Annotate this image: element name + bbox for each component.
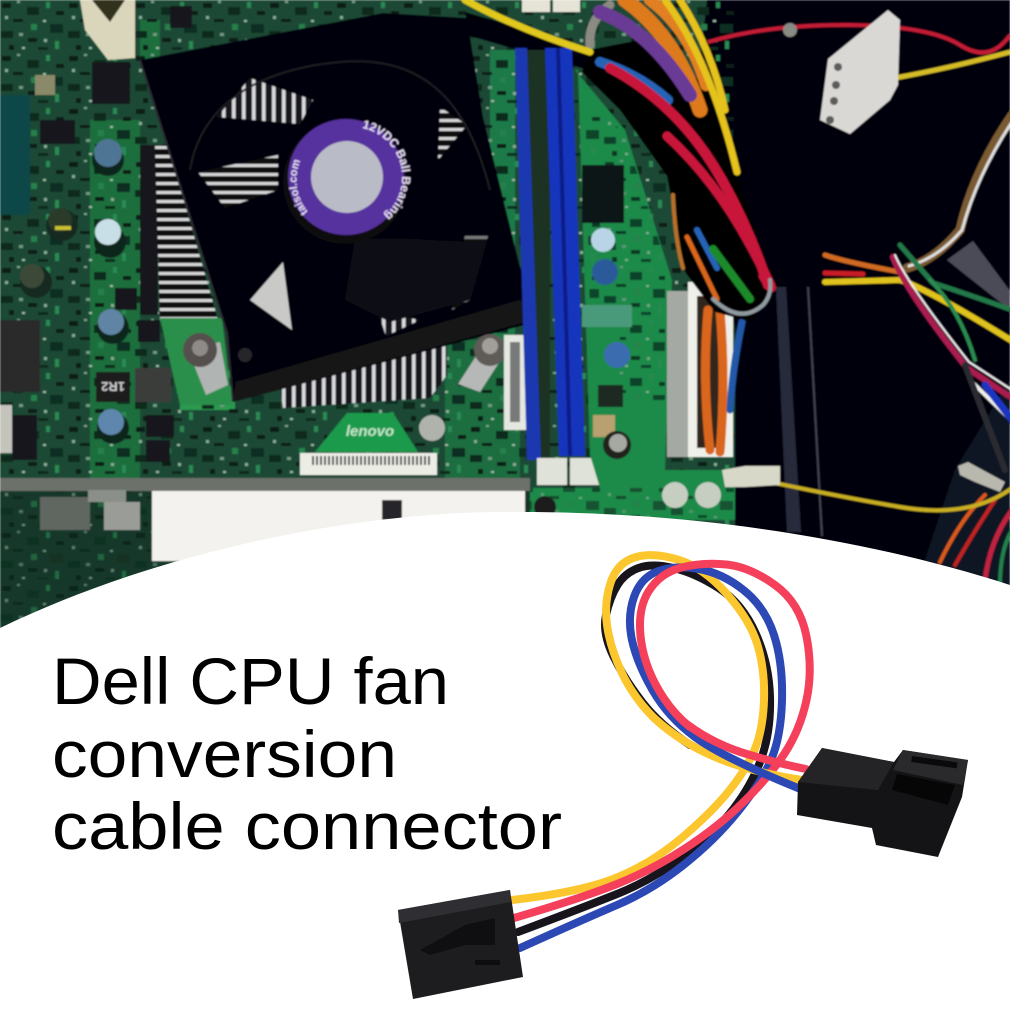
fan hub sticker bbox=[283, 118, 412, 244]
ram label bbox=[504, 335, 526, 430]
four-colour wire loop bbox=[512, 555, 810, 948]
wire ends crossing over into right connector bbox=[654, 718, 806, 788]
barcode label bbox=[300, 453, 437, 475]
bright green board strips bbox=[90, 20, 520, 480]
cream header connector, top left bbox=[80, 0, 135, 60]
fin patch lower right bbox=[378, 312, 420, 336]
expansion card strip bbox=[0, 478, 530, 631]
black board chips bbox=[0, 6, 192, 462]
fin patch lower middle bbox=[250, 262, 292, 330]
atx connector bbox=[667, 282, 733, 457]
ram slot latches bbox=[522, 0, 600, 485]
cpu fan frame bbox=[140, 13, 545, 402]
pcb component texture bbox=[0, 0, 735, 640]
fin patch top bbox=[217, 78, 313, 124]
fin patch left bbox=[198, 155, 278, 208]
title bbox=[52, 644, 562, 863]
black cable behind fan bbox=[465, 12, 590, 70]
left fins bbox=[155, 145, 218, 320]
hub label taisol.com: taisol.com bbox=[288, 158, 308, 217]
dark chassis area bbox=[735, 0, 1010, 640]
chassis metal edges bbox=[776, 241, 1010, 600]
teal chip at left edge bbox=[0, 95, 30, 215]
motherboard base bbox=[0, 0, 740, 640]
frame outline bbox=[140, 60, 233, 402]
white molex connector bbox=[820, 10, 900, 134]
product: conversion cable bbox=[398, 555, 968, 999]
small white fan header bbox=[722, 466, 780, 487]
4-pin fan connector, left bbox=[398, 890, 523, 999]
red wire, top right bbox=[708, 25, 1010, 53]
power supply cable bundle bbox=[465, 0, 772, 322]
fan ring bbox=[190, 61, 490, 190]
heatsink under fan bbox=[155, 145, 447, 408]
capacitors bbox=[20, 139, 445, 444]
blade highlight right bbox=[345, 239, 487, 322]
fan opening and blades bbox=[140, 60, 540, 402]
yellow wire from molex bbox=[895, 52, 1010, 78]
lenovo logo plate: lenovo bbox=[346, 423, 394, 440]
cable tie bbox=[783, 23, 797, 37]
chassis left edge beside board bbox=[700, 0, 760, 530]
small fan cable, yellow bbox=[752, 478, 1010, 510]
3-pin fan connector, right bbox=[797, 748, 968, 857]
ram slots bbox=[515, 48, 585, 460]
white curved panel bbox=[0, 512, 1010, 1010]
orange wires into atx bbox=[705, 310, 742, 452]
title line 2: conversion bbox=[52, 717, 397, 791]
fin patch right side bbox=[452, 235, 488, 310]
hub label 12VDC Ball Bearing: 12VDC Ball Bearing bbox=[362, 119, 412, 221]
bottom fins bbox=[280, 340, 447, 408]
frame bottom band bbox=[233, 300, 540, 402]
fin patch right bbox=[438, 107, 467, 160]
inductor grey bbox=[135, 368, 171, 402]
frame screw bbox=[238, 348, 252, 362]
right wire harness bbox=[825, 115, 1010, 585]
inductor 1R2: 1R2 bbox=[101, 379, 125, 394]
standoff screws bbox=[183, 333, 506, 395]
clear connector lower right bbox=[958, 462, 1005, 492]
title line 3: cable connector bbox=[52, 789, 562, 863]
green clearance below fins bbox=[160, 318, 232, 405]
green board right of ram bbox=[525, 70, 735, 520]
inductor 1R2 bbox=[96, 372, 130, 402]
title line 1: Dell CPU fan bbox=[52, 644, 449, 718]
photo: computer interior bbox=[0, 0, 1010, 628]
lenovo logo plate bbox=[315, 413, 418, 452]
